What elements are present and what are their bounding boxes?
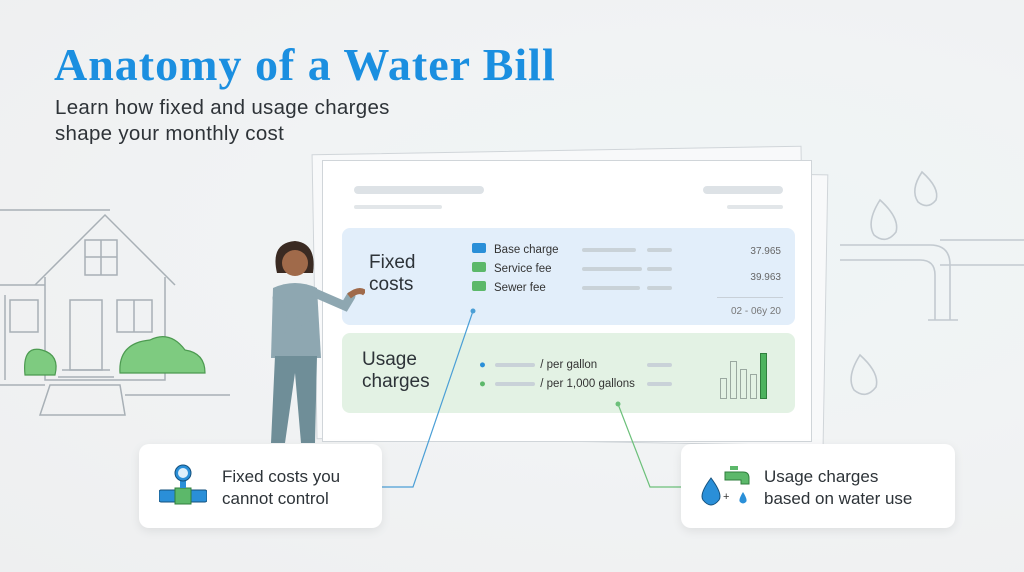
title: Anatomy of a Water Bill (54, 39, 556, 90)
line items: Service fee (494, 263, 552, 275)
amounts: 39.963 (750, 272, 781, 283)
heading: usage charges (362, 349, 430, 392)
bill document (312, 146, 828, 444)
person illustration (271, 241, 365, 443)
heading: fixed costs: Fixed (369, 252, 415, 273)
callout text (222, 467, 340, 508)
heading: usage charges: Usage (362, 349, 417, 370)
callout text: based on water use (764, 489, 912, 508)
callout: usage charges (681, 444, 955, 528)
callout text: Fixed costs you (222, 467, 340, 486)
icon: water meter pipe (159, 464, 207, 504)
callout: fixed costs (139, 444, 382, 528)
callout text: cannot control (222, 489, 329, 508)
background illustration: pipes and drops (840, 170, 1024, 396)
panel: fixed costs (342, 228, 795, 325)
rate lines: ● / per gallon (479, 359, 597, 371)
amounts (750, 246, 781, 283)
heading: usage charges: charges (362, 371, 430, 392)
panel: usage charges (342, 333, 795, 413)
rate lines: ● / per 1,000 gallons (479, 378, 635, 390)
heading: fixed costs: costs (369, 274, 413, 295)
subtitle: Learn how fixed and usage charges (55, 96, 390, 119)
subtitle: shape your monthly cost (55, 122, 284, 145)
panel: fixed costs: 02 - 06y 20 (731, 306, 781, 317)
icon: drop and faucet (702, 466, 750, 506)
icon: drop and faucet: + (723, 491, 729, 503)
subtitle (55, 96, 390, 145)
rate lines (479, 359, 635, 390)
callout text: Usage charges (764, 467, 878, 486)
bar chart (720, 353, 767, 399)
header placeholder lines (354, 186, 484, 194)
callout text (764, 467, 912, 508)
amounts: 37.965 (750, 246, 781, 257)
line items: Base charge (494, 244, 559, 256)
line items: Sewer fee (494, 282, 546, 294)
line items (472, 243, 559, 294)
heading: fixed costs (369, 252, 415, 295)
background illustration: house (0, 209, 230, 416)
